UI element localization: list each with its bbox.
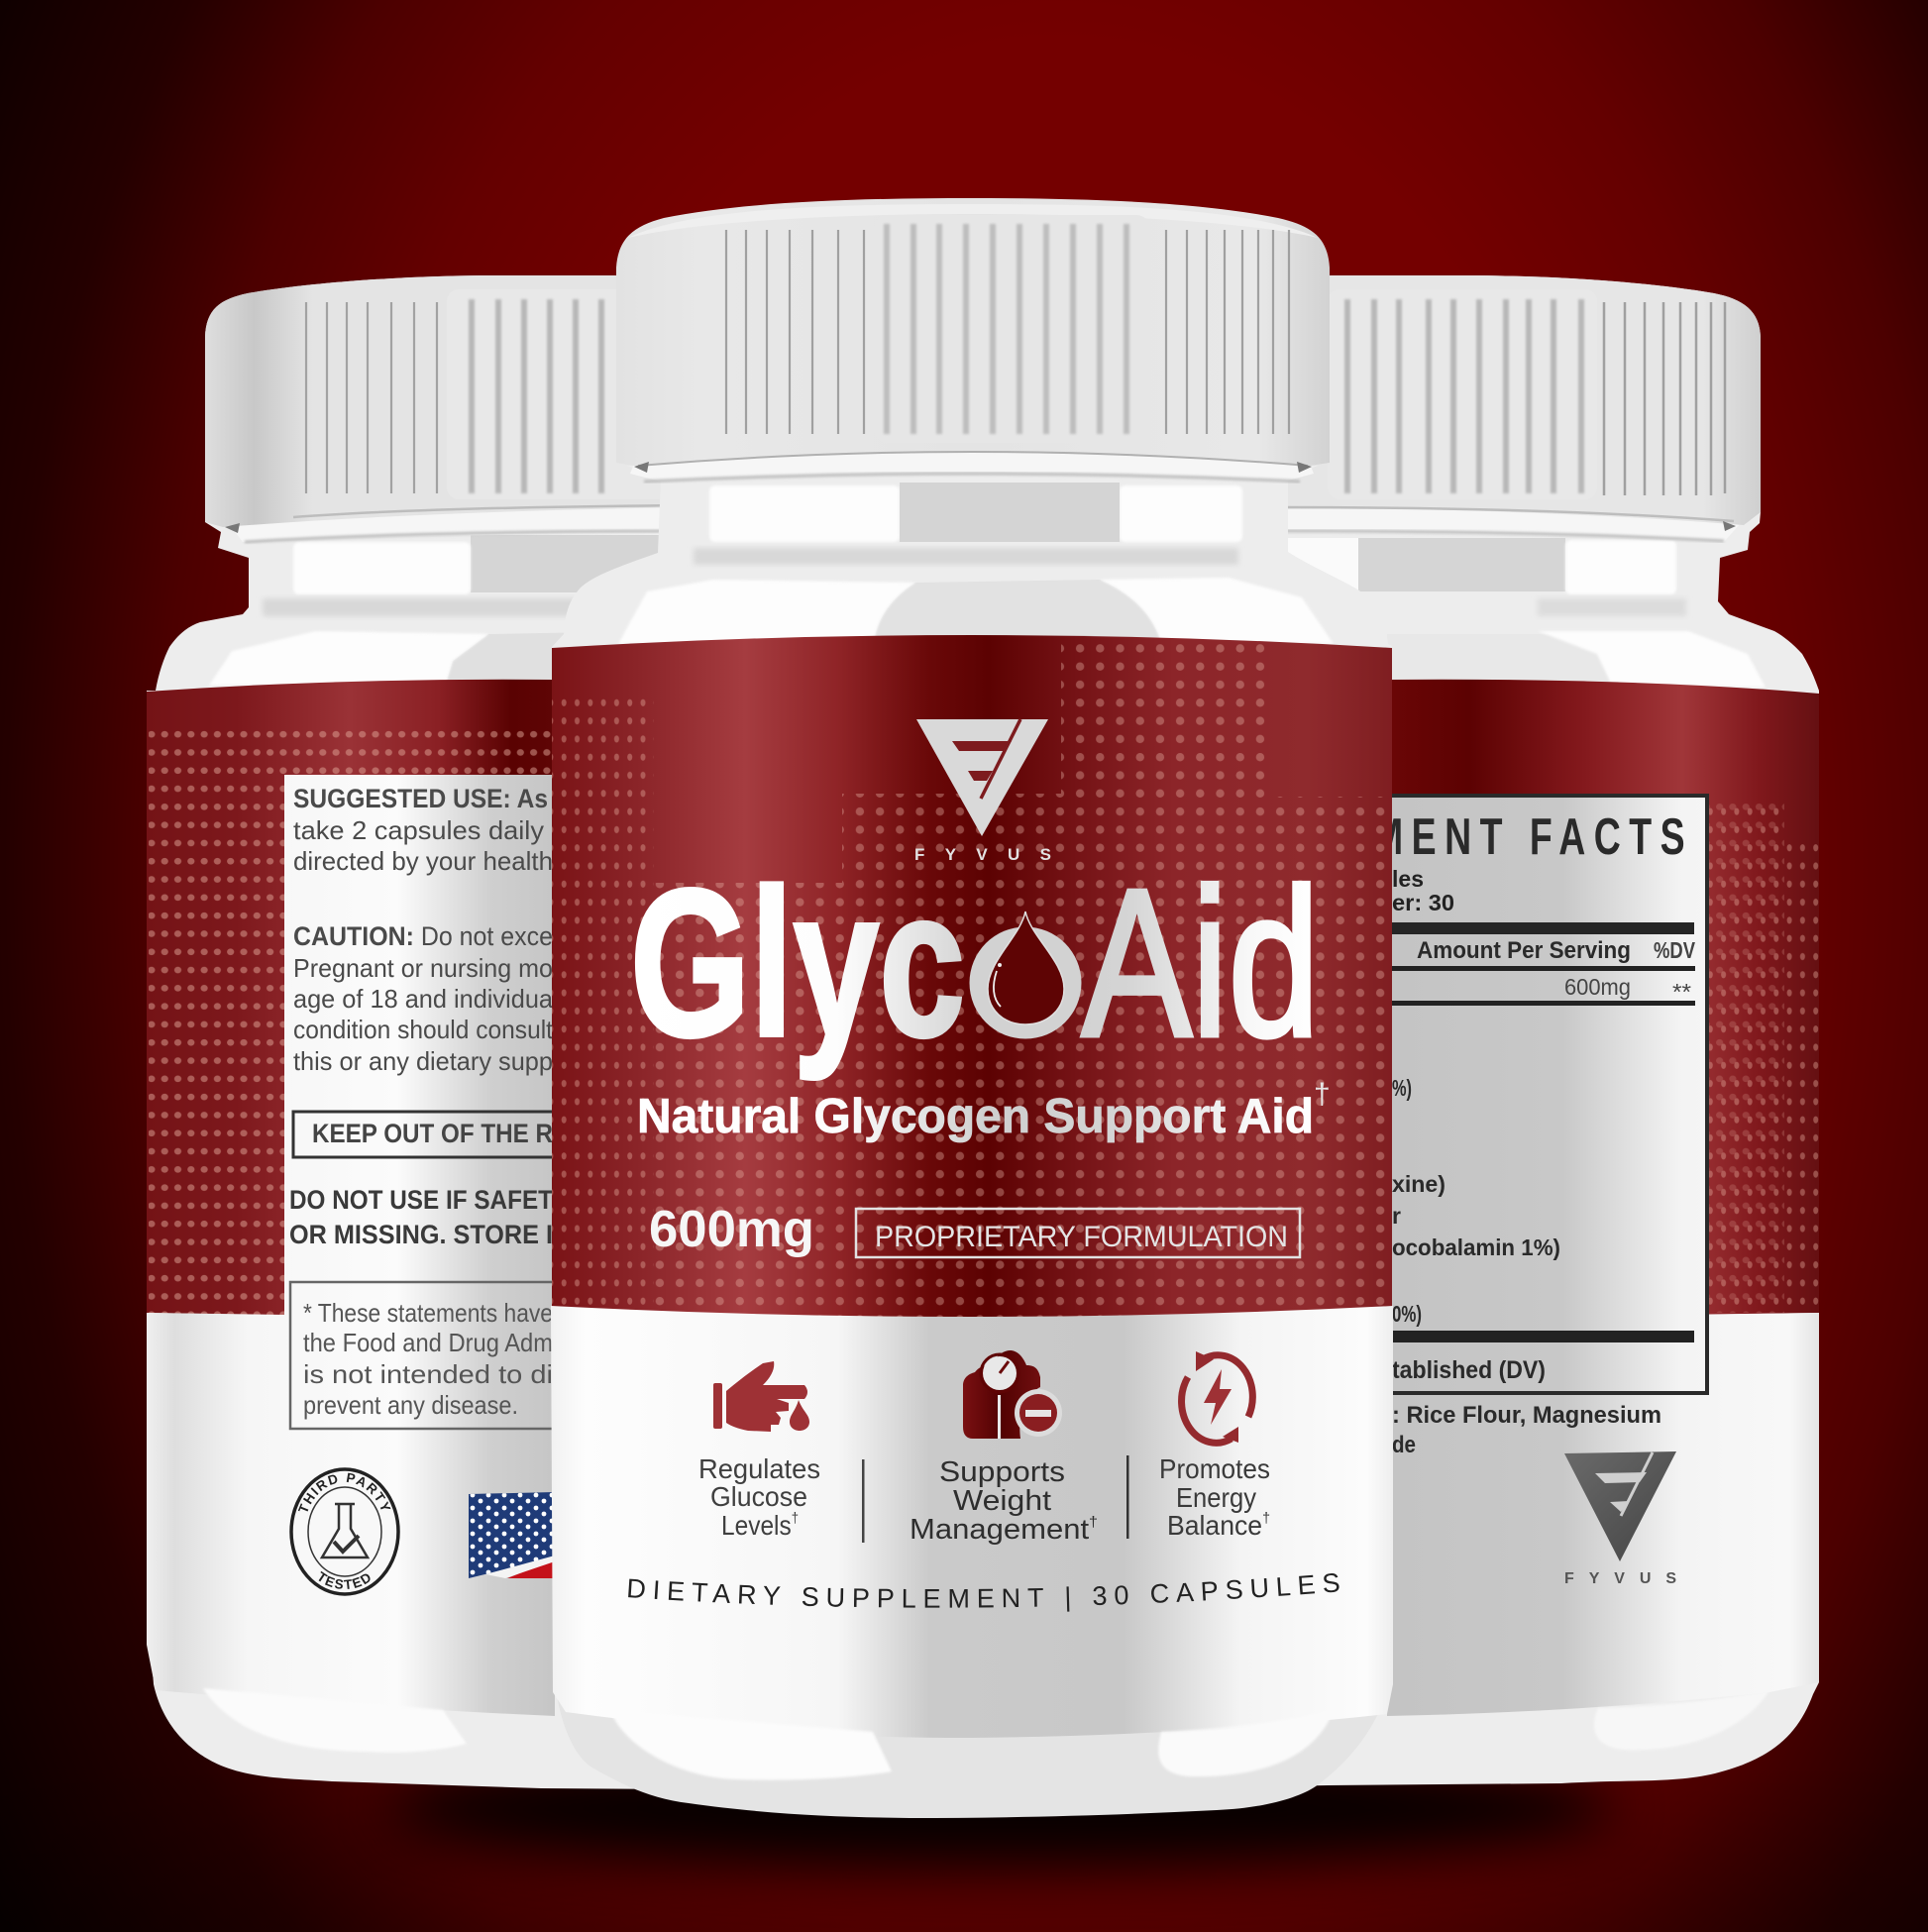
FDA statement box xyxy=(290,1282,568,1429)
benefit: regulates glucose levels: Glucose xyxy=(710,1481,807,1512)
600mg row: 600mg xyxy=(1564,974,1631,1000)
benefit: promotes energy balance: Promotes xyxy=(1159,1453,1270,1484)
600mg row: ** xyxy=(1672,979,1691,1005)
floor shadow under bottles xyxy=(386,1747,1615,1870)
benefit: promotes energy balance xyxy=(1159,1351,1270,1541)
proprietary formulation box xyxy=(856,1209,1300,1257)
title: GlycoAid xyxy=(630,845,1320,1080)
benefit: promotes energy balance: † xyxy=(1262,1510,1270,1527)
center bottle red label xyxy=(552,635,1392,1319)
FDA statement box: prevent any disease. xyxy=(303,1390,518,1420)
logo: FYVUS: FYVUS xyxy=(914,845,1051,864)
third party tested badge: THIRD PARTY xyxy=(297,1472,390,1512)
title: GlycoAid: Aid xyxy=(1082,845,1320,1080)
benefit: regulates glucose levels xyxy=(698,1361,820,1541)
suggested use text: take 2 capsules daily xyxy=(293,815,544,845)
benefit: regulates glucose levels: † xyxy=(792,1510,799,1527)
logo: FYVUS xyxy=(914,719,1051,864)
amount per serving row: %DV xyxy=(1654,937,1696,963)
benefit: regulates glucose levels: Regulates xyxy=(698,1453,820,1484)
caution text xyxy=(293,921,554,1076)
USA flag xyxy=(469,1492,555,1578)
safety warning text: OR MISSING. STORE I xyxy=(289,1220,553,1249)
left bottle label band xyxy=(147,680,555,1320)
third party tested badge xyxy=(289,1467,400,1596)
benefit: regulates glucose levels: Levels xyxy=(721,1510,802,1541)
other ingredients text: de xyxy=(1392,1432,1416,1458)
supplement facts heading: MENT FACTS xyxy=(1372,807,1693,865)
icon: weight scale with minus xyxy=(963,1350,1062,1439)
caution text: this or any dietary supp xyxy=(293,1046,553,1076)
ingredient list fragments: ocobalamin 1%) xyxy=(1392,1234,1560,1260)
center bottle shoulder and neck xyxy=(552,451,1392,664)
icon: energy bolt with circular arrows xyxy=(1182,1351,1252,1443)
other ingredients text xyxy=(1392,1402,1661,1458)
suggested use text: directed by your health xyxy=(293,846,553,876)
icon: blood drop in O xyxy=(969,912,1082,1038)
safety warning text xyxy=(289,1185,553,1249)
caution text: age of 18 and individua xyxy=(293,984,554,1014)
benefit: promotes energy balance: Energy xyxy=(1176,1482,1256,1513)
keep out of reach box xyxy=(293,1112,571,1157)
amount per serving row: Amount Per Serving xyxy=(1417,937,1631,964)
center bottle cap xyxy=(616,198,1330,473)
keep out of reach box: KEEP OUT OF THE R xyxy=(312,1119,553,1148)
other ingredients text: : Rice Flour, Magnesium xyxy=(1392,1402,1661,1429)
dietary supplement line: DIETARY SUPPLEMENT | 30 CAPSULES xyxy=(628,1573,1339,1612)
ingredient list fragments: r xyxy=(1392,1203,1401,1229)
serving info: er: 30 xyxy=(1392,890,1454,915)
benefit: supports weight management xyxy=(910,1350,1098,1546)
proprietary formulation box: PROPRIETARY FORMULATION xyxy=(875,1221,1288,1253)
directions panel xyxy=(284,775,571,1320)
right bottle label band xyxy=(1387,680,1819,1320)
left bottle: back panel with directions xyxy=(147,275,661,1789)
subtitle: † xyxy=(1314,1078,1331,1111)
FDA statement box: the Food and Drug Adm xyxy=(303,1328,553,1357)
benefit: supports weight management: Management xyxy=(910,1514,1077,1546)
daily value note: tablished (DV) xyxy=(1392,1356,1546,1384)
right bottle: supplement facts panel xyxy=(1278,275,1819,1786)
benefit: supports weight management: Supports xyxy=(939,1456,1065,1488)
benefit: supports weight management: † xyxy=(1089,1514,1098,1531)
center bottle: front panel xyxy=(551,198,1393,1818)
serving info: les xyxy=(1392,866,1424,892)
benefit: promotes energy balance: Balance xyxy=(1167,1510,1267,1541)
caution text: Pregnant or nursing mo xyxy=(293,953,553,983)
ingredient list fragments: xine) xyxy=(1392,1171,1446,1197)
FDA statement box: * These statements have xyxy=(303,1298,553,1328)
FDA statement box: is not intended to di xyxy=(303,1359,553,1389)
logo: FYVUS grey: FYVUS xyxy=(1564,1570,1676,1587)
right bottle lower white section xyxy=(1387,1313,1819,1751)
ingredient list fragments xyxy=(1392,1075,1560,1327)
dosage: 600mg: 600mg xyxy=(649,1201,814,1258)
subtitle: Natural Glycogen Support Aid xyxy=(637,1090,1314,1143)
caution text: condition should consult xyxy=(293,1015,554,1044)
left bottle cap xyxy=(205,275,695,533)
center bottle white lower section xyxy=(551,1306,1393,1818)
supplement facts box xyxy=(1372,796,1707,1393)
right bottle cap xyxy=(1278,275,1761,531)
600mg row xyxy=(1564,974,1691,1005)
ingredient list fragments: 0%) xyxy=(1392,1301,1422,1327)
safety warning text: DO NOT USE IF SAFET xyxy=(289,1185,553,1215)
benefit: supports weight management: Weight xyxy=(953,1485,1051,1517)
caution text: CAUTION: Do not exce xyxy=(293,921,553,951)
icon: hand with blood drop xyxy=(713,1361,809,1432)
left bottle lower white section xyxy=(147,1313,555,1753)
suggested use text xyxy=(293,784,553,876)
logo: FYVUS grey xyxy=(1564,1451,1676,1587)
suggested use text: SUGGESTED USE: As xyxy=(293,784,548,813)
third party tested badge: TESTED xyxy=(319,1571,371,1589)
halftone dot pattern xyxy=(552,639,1392,1319)
title: GlycoAid: Glyc xyxy=(630,845,965,1080)
ingredient list fragments: %) xyxy=(1392,1075,1412,1101)
serving info xyxy=(1392,866,1454,915)
